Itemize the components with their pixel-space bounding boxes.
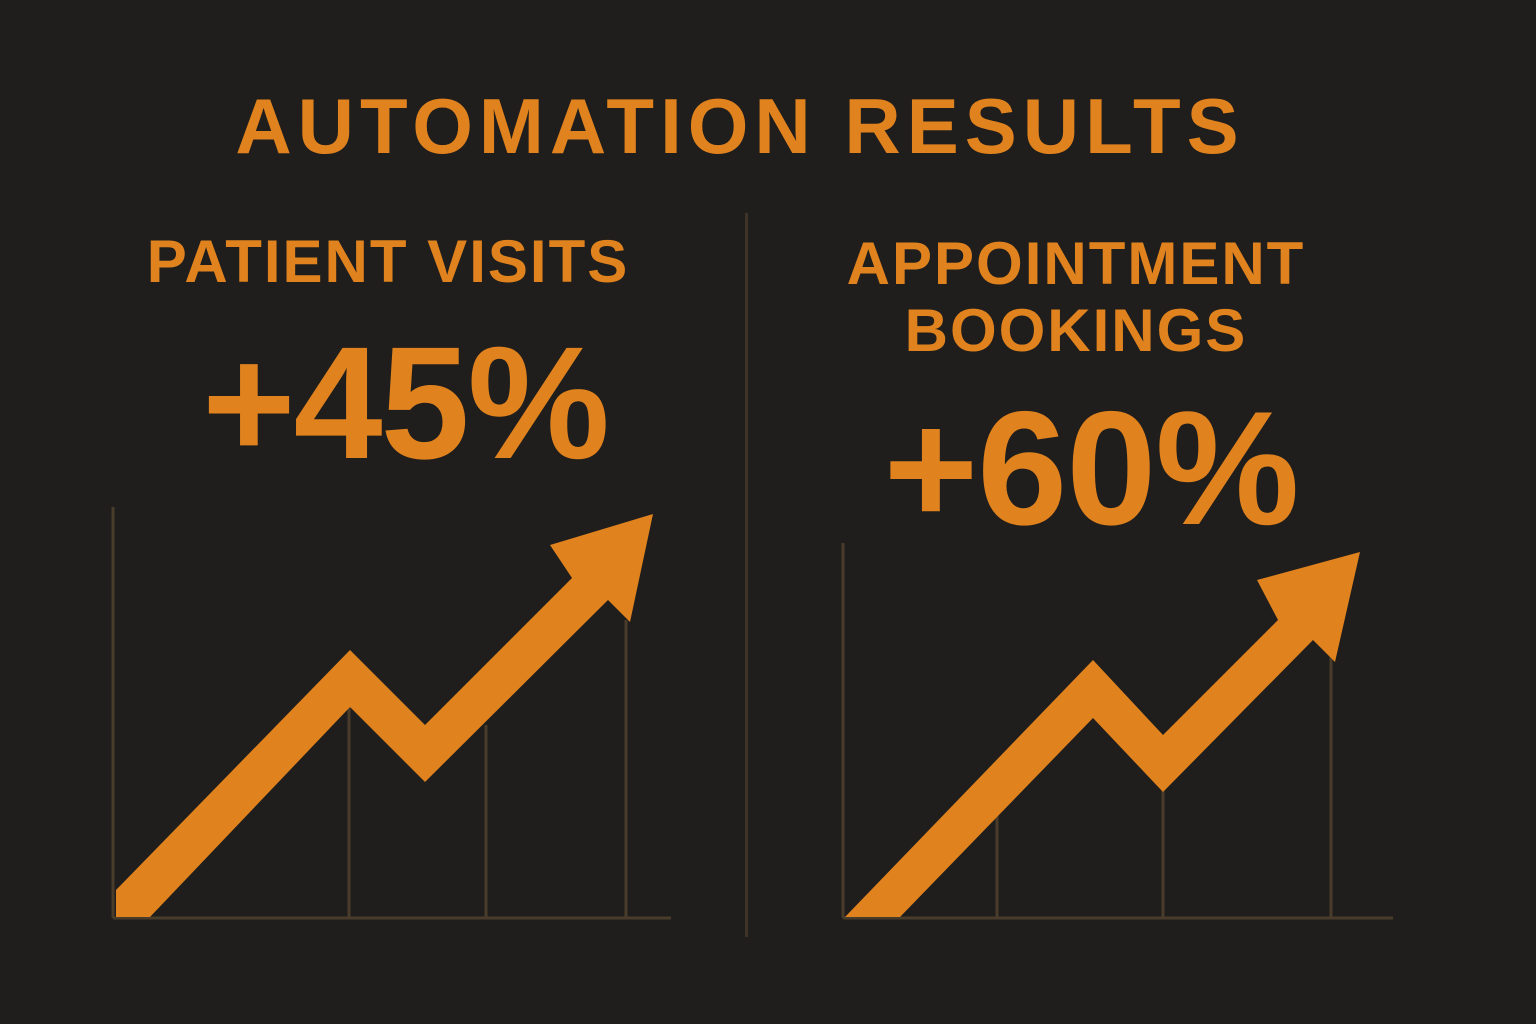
title: AUTOMATION RESULTS (235, 82, 1245, 170)
divider (745, 213, 748, 937)
stat: +45%: +45% (202, 313, 608, 492)
panel: patient visits (112, 228, 671, 920)
arrow: upward trend (116, 514, 653, 917)
stat: +60%: +60% (884, 378, 1298, 559)
heading: patient visits: PATIENT VISITS (147, 228, 629, 295)
panel: appointment bookings (842, 230, 1393, 920)
chart: bookings growth (842, 543, 1393, 920)
heading: appointment bookings: BOOKINGS (905, 297, 1247, 364)
arrow: upward trend (845, 552, 1360, 917)
heading: appointment bookings (847, 230, 1305, 364)
heading: appointment bookings: APPOINTMENT (847, 230, 1305, 297)
chart: patient visits growth (112, 507, 671, 920)
